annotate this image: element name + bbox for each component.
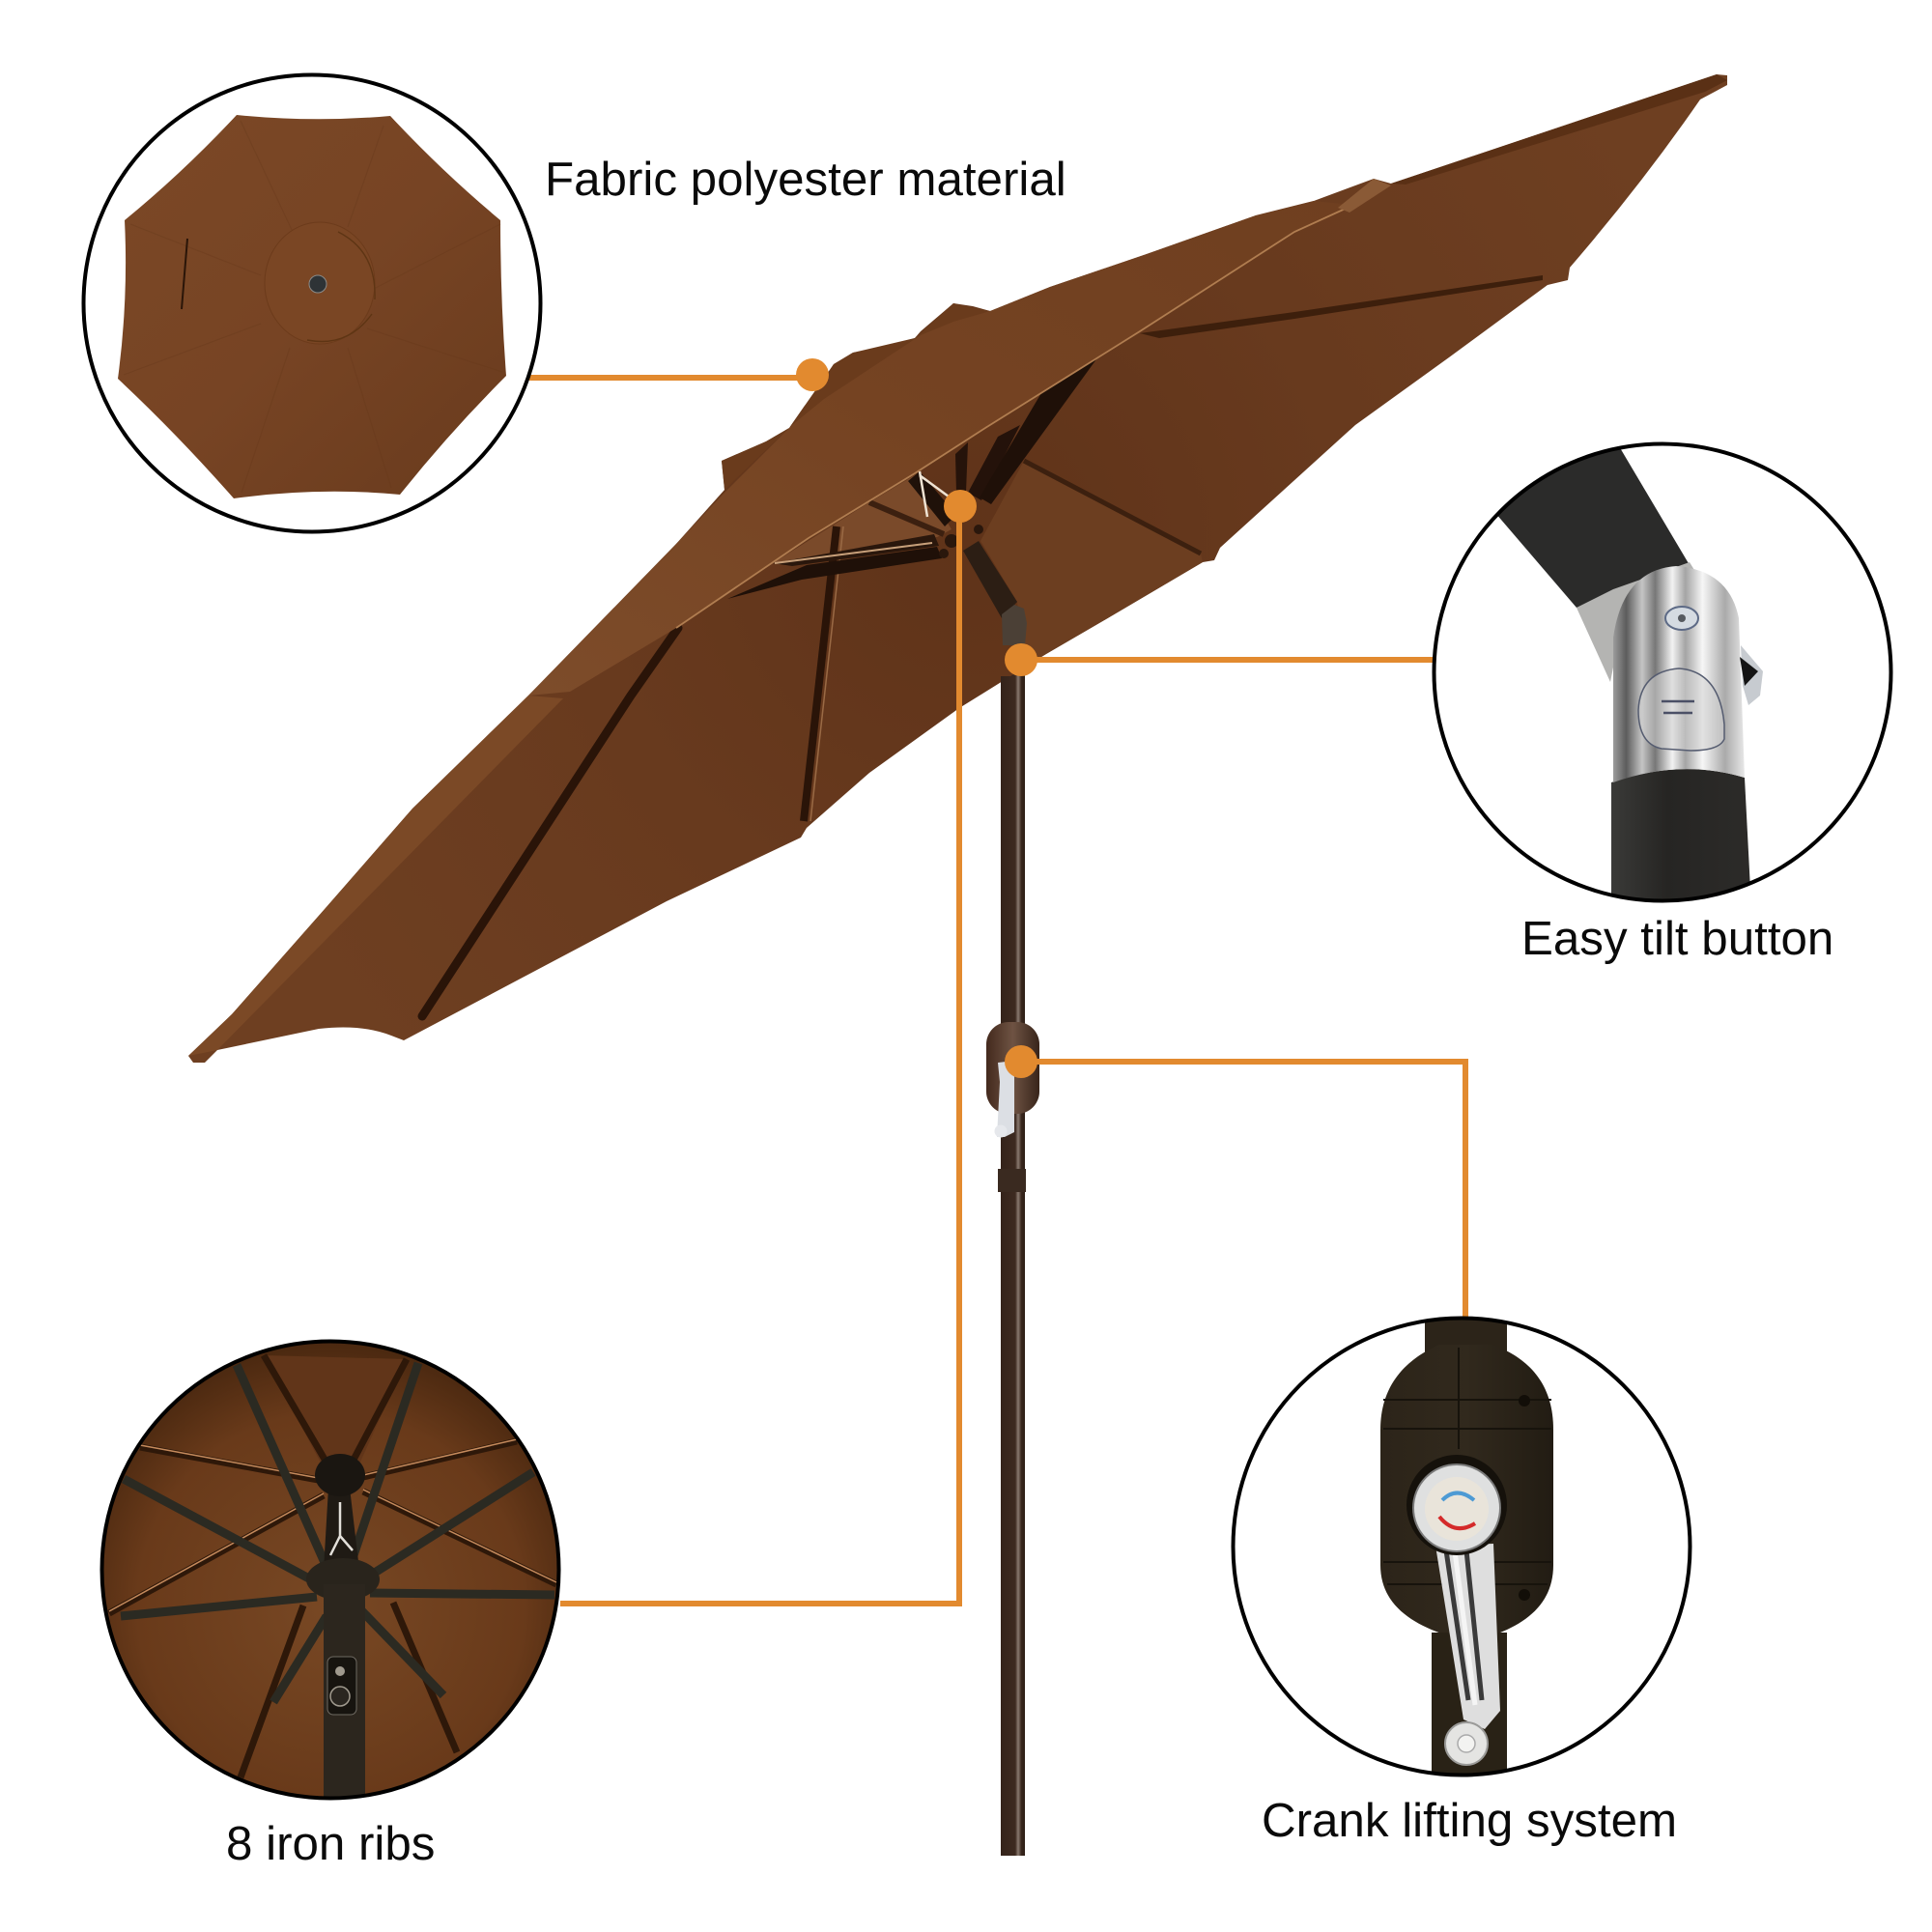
tilt joint bbox=[1002, 605, 1027, 645]
connector: fabric callout line bbox=[529, 375, 812, 381]
inset ring bbox=[83, 75, 541, 531]
umbrella product illustration bbox=[188, 74, 1727, 1856]
crank handle bbox=[997, 1061, 1014, 1137]
arm channels bbox=[1446, 1550, 1482, 1700]
upper shaft bbox=[325, 1493, 358, 1561]
body ridges bbox=[1383, 1400, 1551, 1584]
panel: tilt inset bbox=[1434, 425, 1891, 908]
label: tilt: Easy tilt button bbox=[1521, 912, 1833, 965]
bottom pole bbox=[1432, 1633, 1507, 1777]
silver collar bbox=[1577, 562, 1697, 682]
upper right rib bbox=[1140, 275, 1543, 338]
y spring bbox=[330, 1502, 353, 1555]
dark top edge strip at right tip bbox=[1391, 74, 1727, 185]
tilt arm bbox=[963, 541, 1017, 618]
crank knob bbox=[1445, 1722, 1488, 1765]
front canopy panel bbox=[528, 201, 1352, 696]
inset ring bbox=[102, 1341, 558, 1799]
primary ribs bbox=[121, 1363, 554, 1702]
canopy top view bbox=[118, 115, 506, 498]
pole bbox=[1001, 618, 1025, 1856]
label: crank: Crank lifting system bbox=[1262, 1794, 1677, 1847]
connector: tilt callout line bbox=[1021, 657, 1433, 663]
lit panel below right rib bbox=[980, 461, 1203, 667]
upper pole section bbox=[1498, 450, 1689, 608]
hub rivets bbox=[939, 525, 983, 558]
crank body bbox=[1380, 1345, 1553, 1634]
bolt bbox=[1665, 607, 1698, 630]
connector: crank callout line bbox=[1021, 1062, 1465, 1318]
connector: iron ribs callout line bbox=[560, 506, 959, 1604]
lower left main rib bbox=[422, 628, 678, 1016]
label: fabric: Fabric polyester material bbox=[545, 153, 1066, 206]
panel: crank inset bbox=[1233, 1314, 1690, 1777]
pole collar bbox=[998, 1169, 1026, 1192]
pole slot bbox=[327, 1657, 356, 1715]
crank housing bbox=[986, 1022, 1039, 1114]
tilt button bbox=[1638, 668, 1724, 751]
struts around the hub bbox=[727, 353, 1101, 599]
inset ring bbox=[1233, 1318, 1690, 1776]
panel: ribs inset bbox=[100, 1340, 560, 1816]
rib highlights bbox=[109, 1439, 556, 1611]
lower right rib bbox=[1024, 461, 1201, 554]
crank knob bbox=[995, 1124, 1007, 1138]
canopy seams bbox=[124, 121, 502, 493]
top hub bbox=[315, 1454, 365, 1496]
light fold on left canopy edge bbox=[188, 696, 563, 1056]
inset ring bbox=[1434, 444, 1891, 900]
fold tip on top edge bbox=[1338, 179, 1391, 213]
secondary ribs bbox=[109, 1355, 556, 1777]
lit patch under hub bbox=[773, 473, 952, 563]
main pole bbox=[324, 1596, 365, 1797]
pole section visible below canopy hem bbox=[1001, 676, 1025, 715]
callout dot: fabric bbox=[796, 358, 829, 391]
top wedge shade bbox=[268, 1355, 403, 1463]
callout dot: crank bbox=[1005, 1045, 1037, 1078]
lower hub bbox=[306, 1558, 380, 1601]
lower pole bbox=[1611, 769, 1751, 908]
tilt lever bbox=[1741, 645, 1763, 705]
fabric background bbox=[100, 1340, 560, 1800]
callout dot: tilt bbox=[1005, 643, 1037, 676]
crank arm bbox=[1435, 1544, 1500, 1729]
chrome joint bbox=[1613, 566, 1745, 782]
dial arcs bbox=[1442, 1493, 1474, 1500]
centre rib bbox=[804, 526, 837, 821]
head shadow bbox=[1406, 1455, 1507, 1555]
callout dot: ribs bbox=[944, 490, 977, 523]
label: ribs: 8 iron ribs bbox=[226, 1817, 435, 1870]
panel: fabric inset bbox=[83, 75, 541, 531]
canopy underside and silhouette bbox=[188, 74, 1727, 1063]
rear flap behind front panel bbox=[722, 303, 990, 490]
top pole bbox=[1425, 1320, 1507, 1352]
front panel seam bbox=[676, 207, 1350, 628]
button marks bbox=[1662, 701, 1694, 713]
grommet bbox=[309, 275, 327, 293]
body bolts bbox=[1519, 1395, 1530, 1406]
crank head bbox=[1413, 1464, 1500, 1551]
vent flap shadow bbox=[307, 232, 375, 341]
side slit bbox=[182, 239, 187, 309]
top vent bbox=[265, 222, 375, 344]
